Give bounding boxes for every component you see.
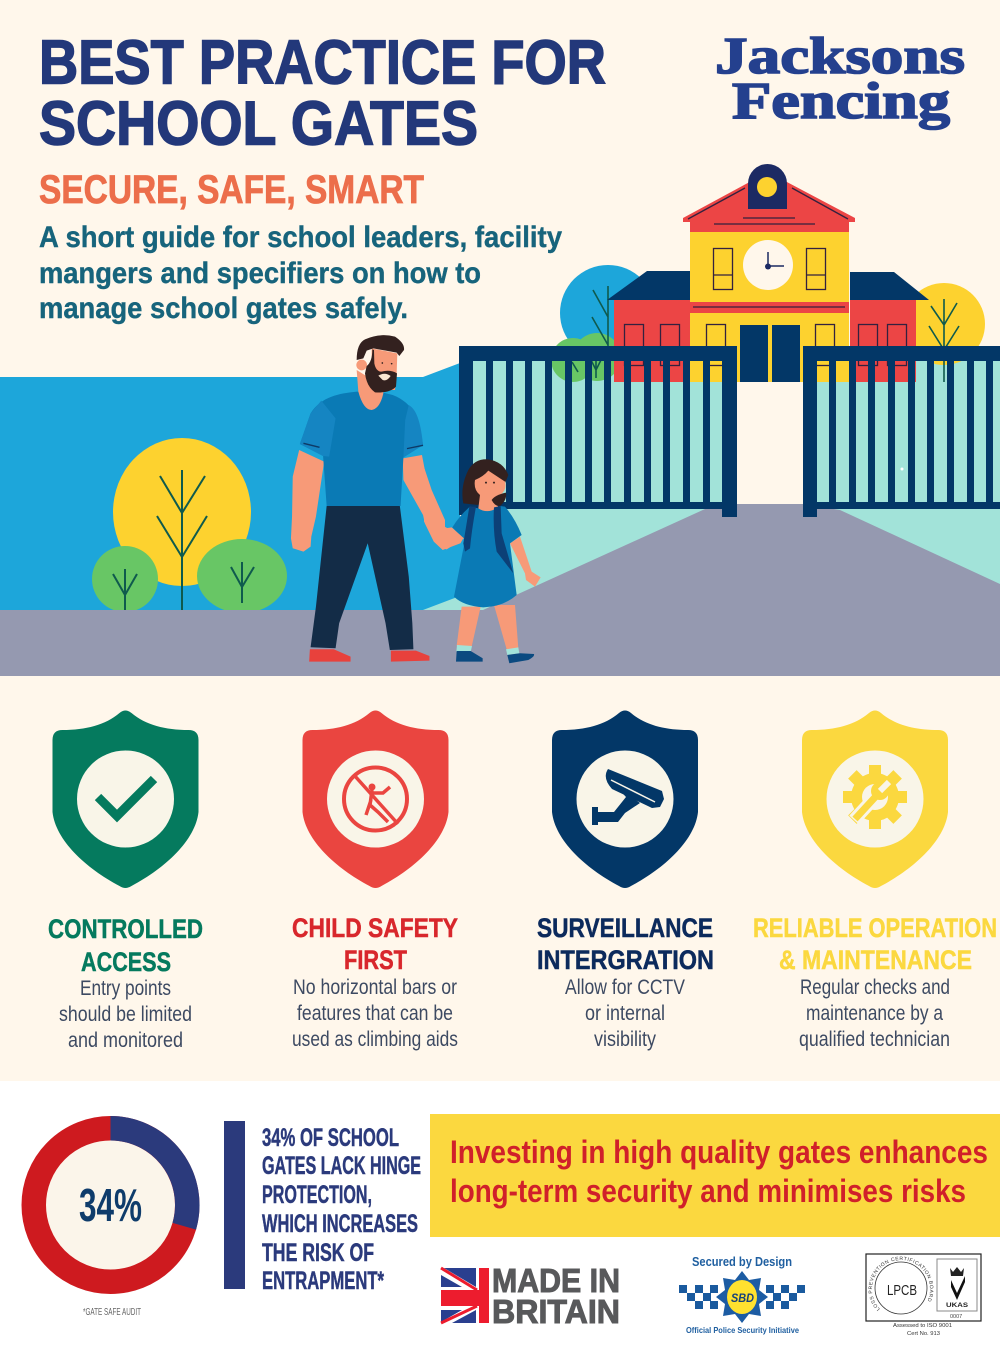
man xyxy=(291,335,464,662)
description: Regular checks and xyxy=(800,976,950,999)
description: should be limited xyxy=(59,1003,192,1026)
logo: LPCB UKAS: UKAS xyxy=(946,1302,969,1309)
logo: Jacksons Fencing: Fencing xyxy=(732,73,950,130)
panel: surveillance xyxy=(537,710,714,1051)
panel: child safety xyxy=(292,710,458,1051)
heading xyxy=(753,913,997,975)
school building xyxy=(607,164,929,382)
logo: LPCB UKAS: Assessed to ISO 9001 xyxy=(893,1323,952,1329)
title xyxy=(39,28,606,158)
heading: FIRST xyxy=(344,945,407,975)
logo: Jacksons Fencing: Jacksons xyxy=(715,28,965,85)
heading xyxy=(48,914,203,977)
girl xyxy=(420,455,541,663)
trees behind school xyxy=(551,265,985,382)
logo: made in Britain: BRITAIN xyxy=(492,1293,620,1330)
description xyxy=(565,976,685,1051)
intro text: manage school gates safely. xyxy=(39,292,408,325)
heading: CHILD SAFETY xyxy=(292,913,458,943)
description xyxy=(59,977,192,1052)
mint backdrop xyxy=(423,360,1000,610)
statistic text: THE RISK OF xyxy=(262,1239,374,1267)
heading xyxy=(292,913,458,975)
logo: Secured by Design xyxy=(679,1254,805,1335)
windows xyxy=(624,248,906,366)
logo: LPCB UKAS: 0007 xyxy=(950,1314,962,1320)
intro text: mangers and specifiers on how to xyxy=(39,257,481,290)
description: and monitored xyxy=(68,1029,183,1052)
description: used as climbing aids xyxy=(292,1028,458,1051)
main roof xyxy=(683,182,855,232)
shield icon: CCTV camera xyxy=(552,710,698,888)
description: or internal xyxy=(585,1002,665,1025)
wings xyxy=(614,300,690,382)
doors xyxy=(740,325,768,382)
statistic text xyxy=(262,1124,421,1295)
statistic text: WHICH INCREASES xyxy=(262,1210,418,1238)
logo: LPCB UKAS: LOSS PREVENTION CERTIFICATION BOARD xyxy=(868,1256,934,1312)
statistic text: GATES LACK HINGE xyxy=(262,1152,421,1180)
logo: LPCB UKAS xyxy=(865,1253,982,1337)
panel: controlled access xyxy=(48,710,203,1052)
logo: LPCB UKAS: Cert No. 913 xyxy=(907,1331,940,1337)
heading: SURVEILLANCE xyxy=(537,913,713,943)
intro text: A short guide for school leaders, facility xyxy=(39,221,562,254)
statistic text: PROTECTION, xyxy=(262,1181,372,1209)
hero illustration xyxy=(0,164,1000,676)
logo: Secured by Design: SBD xyxy=(731,1291,754,1305)
logo: Secured by Design: Official Police Security Initiative xyxy=(686,1325,799,1335)
description: maintenance by a xyxy=(806,1002,943,1025)
shield icon: check xyxy=(52,710,198,888)
statistic text: 34% OF SCHOOL xyxy=(262,1124,399,1152)
description: qualified technician xyxy=(799,1028,950,1051)
heading: & MAINTENANCE xyxy=(779,945,972,975)
shield icon: no climbing xyxy=(302,710,448,888)
description: No horizontal bars or xyxy=(293,976,457,999)
description: features that can be xyxy=(297,1002,453,1025)
heading xyxy=(537,913,714,975)
description: Allow for CCTV xyxy=(565,976,685,999)
heading: INTERGRATION xyxy=(537,945,714,975)
title: BEST PRACTICE FOR xyxy=(39,28,606,98)
heading: ACCESS xyxy=(81,947,171,977)
description xyxy=(292,976,458,1051)
title: SCHOOL GATES xyxy=(39,90,478,158)
statistic text: ENTRAPMENT* xyxy=(262,1267,384,1295)
description: Entry points xyxy=(80,977,171,1000)
logo: Secured by Design: Secured by Design xyxy=(692,1254,792,1269)
donut chart: 34%: 34% xyxy=(79,1179,142,1231)
logo: Jacksons Fencing xyxy=(715,28,965,130)
subtitle: SECURE, SAFE, SMART xyxy=(39,168,424,212)
shield icon: gear and wrench xyxy=(802,710,948,888)
intro text xyxy=(39,221,562,325)
logo: made in Britain: MADE IN xyxy=(492,1262,620,1299)
clock xyxy=(743,240,793,290)
donut chart: 34% xyxy=(34,1128,187,1282)
cupola xyxy=(748,164,787,209)
panel: reliable operation xyxy=(753,710,997,1051)
road xyxy=(0,504,1000,676)
statistic bar xyxy=(224,1121,245,1289)
heading: CONTROLLED xyxy=(48,914,203,944)
blue background xyxy=(0,363,490,610)
trees left xyxy=(92,438,287,613)
logo: made in Britain xyxy=(441,1262,620,1330)
footnote: *GATE SAFE AUDIT xyxy=(83,1307,141,1318)
description: visibility xyxy=(594,1028,656,1051)
logo: LPCB UKAS: LPCB xyxy=(887,1282,917,1299)
description xyxy=(799,976,950,1051)
right gate xyxy=(803,346,1000,517)
tower xyxy=(690,232,849,382)
left gate xyxy=(459,346,737,517)
callout banner xyxy=(430,1114,1000,1237)
